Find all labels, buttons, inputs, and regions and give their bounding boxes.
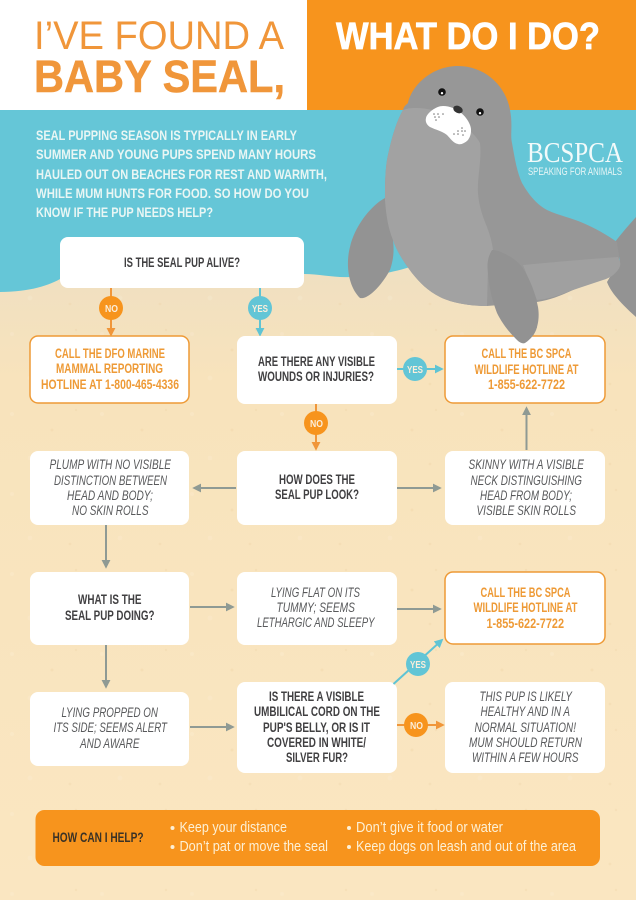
box: call BC SPCA hotline: 1-855-622-7722 (488, 377, 565, 392)
box: umbilical cord: IS THERE A VISIBLE (269, 689, 364, 704)
eyes (438, 88, 446, 96)
sand background (0, 250, 636, 900)
connector: wounds no: NO (310, 419, 323, 430)
connector: alive no: NO (105, 304, 118, 315)
body (385, 66, 620, 306)
box: lying propped: ITS SIDE; SEEMS ALERT (54, 720, 168, 735)
box: umbilical cord: UMBILICAL CORD ON THE (254, 704, 380, 719)
box: lying flat: LETHARGIC AND SLEEPY (257, 615, 375, 630)
box: call BC SPCA hotline: CALL THE BC SPCA (482, 346, 572, 361)
box: call DFO hotline (30, 336, 189, 403)
box: is the seal pup alive: IS THE SEAL PUP ALIVE? (124, 255, 240, 270)
box: plump (30, 451, 189, 525)
panel: how can I help (36, 810, 600, 866)
intro text: HAULED OUT ON BEACHES FOR REST AND WARMTH, (36, 166, 327, 182)
connector: umbilical yes (394, 640, 442, 684)
box: call DFO hotline: MAMMAL REPORTING (56, 361, 163, 376)
box: skinny: HEAD FROM BODY; (480, 488, 572, 503)
box: plump: NO SKIN ROLLS (72, 503, 148, 518)
connector: umbilical no: NO (410, 721, 423, 732)
connector: umbilical yes: YES (410, 660, 426, 671)
connector: wounds yes (397, 357, 442, 381)
box: umbilical cord: PUP'S BELLY, OR IS IT (263, 720, 371, 735)
box: what is the seal pup doing: WHAT IS THE (78, 592, 142, 607)
box: lying propped: AND AWARE (79, 736, 140, 751)
intro text: SUMMER AND YOUNG PUPS SPEND MANY HOURS (36, 146, 316, 162)
heading: how can I help: HOW CAN I HELP? (52, 830, 144, 845)
box: skinny (445, 451, 605, 525)
arrow: lying flat to hotline (397, 608, 440, 610)
box: what is the seal pup doing (30, 572, 189, 645)
tips list: Don’t give it food or water (356, 819, 503, 836)
box: call BC SPCA hotline second: CALL THE BC SPCA (480, 585, 571, 600)
back left flipper (348, 198, 394, 298)
box: likely healthy: HEALTHY AND IN A (480, 704, 570, 719)
box: likely healthy: MUM SHOULD RETURN (469, 735, 582, 750)
arrow: propped to umbilical (190, 726, 233, 728)
box: call DFO hotline: CALL THE DFO MARINE (55, 346, 165, 361)
box: likely healthy: THIS PUP IS LIKELY (480, 689, 573, 704)
box: plump: DISTINCTION BETWEEN (54, 473, 167, 488)
whisker dots (433, 113, 466, 136)
icon: seal illustration (348, 66, 636, 343)
box: call BC SPCA hotline second: 1-855-622-7722 (486, 616, 564, 631)
arrow: doing to lying flat (190, 606, 233, 608)
belly highlight (385, 108, 493, 306)
box: likely healthy: NORMAL SITUATION! (474, 720, 576, 735)
box: lying propped (30, 692, 189, 766)
box: umbilical cord (237, 682, 397, 773)
box: umbilical cord: COVERED IN WHITE/ (267, 735, 366, 750)
box: call BC SPCA hotline second (445, 572, 605, 644)
box: how does the seal pup look: HOW DOES THE (279, 472, 355, 487)
box: what is the seal pup doing: SEAL PUP DOING? (65, 608, 154, 623)
box: skinny: SKINNY WITH A VISIBLE (468, 457, 585, 472)
tips list: Keep your distance (180, 819, 287, 836)
box: how does the seal pup look: SEAL PUP LOOK? (275, 487, 359, 502)
box: how does the seal pup look (237, 451, 397, 525)
box: lying propped: LYING PROPPED ON (62, 705, 158, 720)
box: skinny: VISIBLE SKIN ROLLS (476, 503, 576, 518)
front flipper (487, 250, 539, 343)
box: lying flat: LYING FLAT ON ITS (271, 585, 360, 600)
arrow: skinny up to hotline (526, 408, 528, 450)
blue sea band with wave edge (0, 110, 636, 292)
title panel: what do I do: WHAT DO I DO? (336, 16, 600, 58)
box: call BC SPCA hotline second: WILDLIFE HOTLINE AT (474, 600, 578, 615)
box: plump: PLUMP WITH NO VISIBLE (50, 457, 172, 472)
arrow: look to skinny (397, 487, 440, 489)
connector: alive yes (248, 288, 272, 335)
intro text: SEAL PUPPING SEASON IS TYPICALLY IN EARLY (36, 127, 298, 143)
box: lying flat (237, 572, 397, 645)
arrow: doing to propped (105, 645, 107, 687)
box: lying flat: TUMMY; SEEMS (276, 600, 355, 615)
nose (452, 104, 464, 115)
box: call BC SPCA hotline (445, 336, 605, 403)
box: call DFO hotline: HOTLINE AT 1-800-465-4336 (41, 377, 179, 392)
box: likely healthy (445, 682, 605, 773)
title panel: I've found a baby seal (0, 0, 307, 110)
intro text: KNOW IF THE PUP NEEDS HELP? (36, 204, 213, 220)
connector: alive yes: YES (252, 304, 268, 315)
muzzle (426, 106, 471, 144)
connector: wounds no (304, 404, 328, 449)
box: skinny: NECK DISTINGUISHING (470, 473, 582, 488)
connector: wounds yes: YES (407, 365, 423, 376)
box: visible wounds: ARE THERE ANY VISIBLE (258, 354, 375, 369)
arrow: plump to doing (105, 525, 107, 567)
title panel: I've found a baby seal: I’VE FOUND A (34, 14, 284, 58)
box: umbilical cord: SILVER FUR? (286, 750, 348, 765)
title panel: I've found a baby seal: BABY SEAL, (34, 51, 285, 102)
intro text (36, 127, 327, 220)
intro text: WHILE MUM HUNTS FOR FOOD. SO HOW DO YOU (36, 185, 309, 201)
flipper overlap on hotline box (508, 325, 537, 343)
box: call BC SPCA hotline: WILDLIFE HOTLINE AT (474, 362, 579, 377)
tail flipper (607, 217, 636, 317)
tips list: Keep dogs on leash and out of the area (356, 838, 577, 855)
box: is the seal pup alive (60, 237, 304, 288)
title panel: what do I do (307, 0, 636, 110)
box: visible wounds: WOUNDS OR INJURIES? (258, 369, 374, 384)
box: likely healthy: WITHIN A FEW HOURS (472, 750, 578, 765)
connector: alive no (99, 288, 123, 335)
box: visible wounds (237, 336, 397, 404)
hind flipper highlight (523, 257, 620, 300)
connector: umbilical no (397, 713, 443, 737)
box: plump: HEAD AND BODY; (67, 488, 153, 503)
arrow: look to plump (194, 487, 236, 489)
tips list (170, 819, 577, 855)
tips list: Don’t pat or move the seal (180, 838, 328, 855)
BC SPCA logo: BCSPCA (527, 138, 624, 169)
